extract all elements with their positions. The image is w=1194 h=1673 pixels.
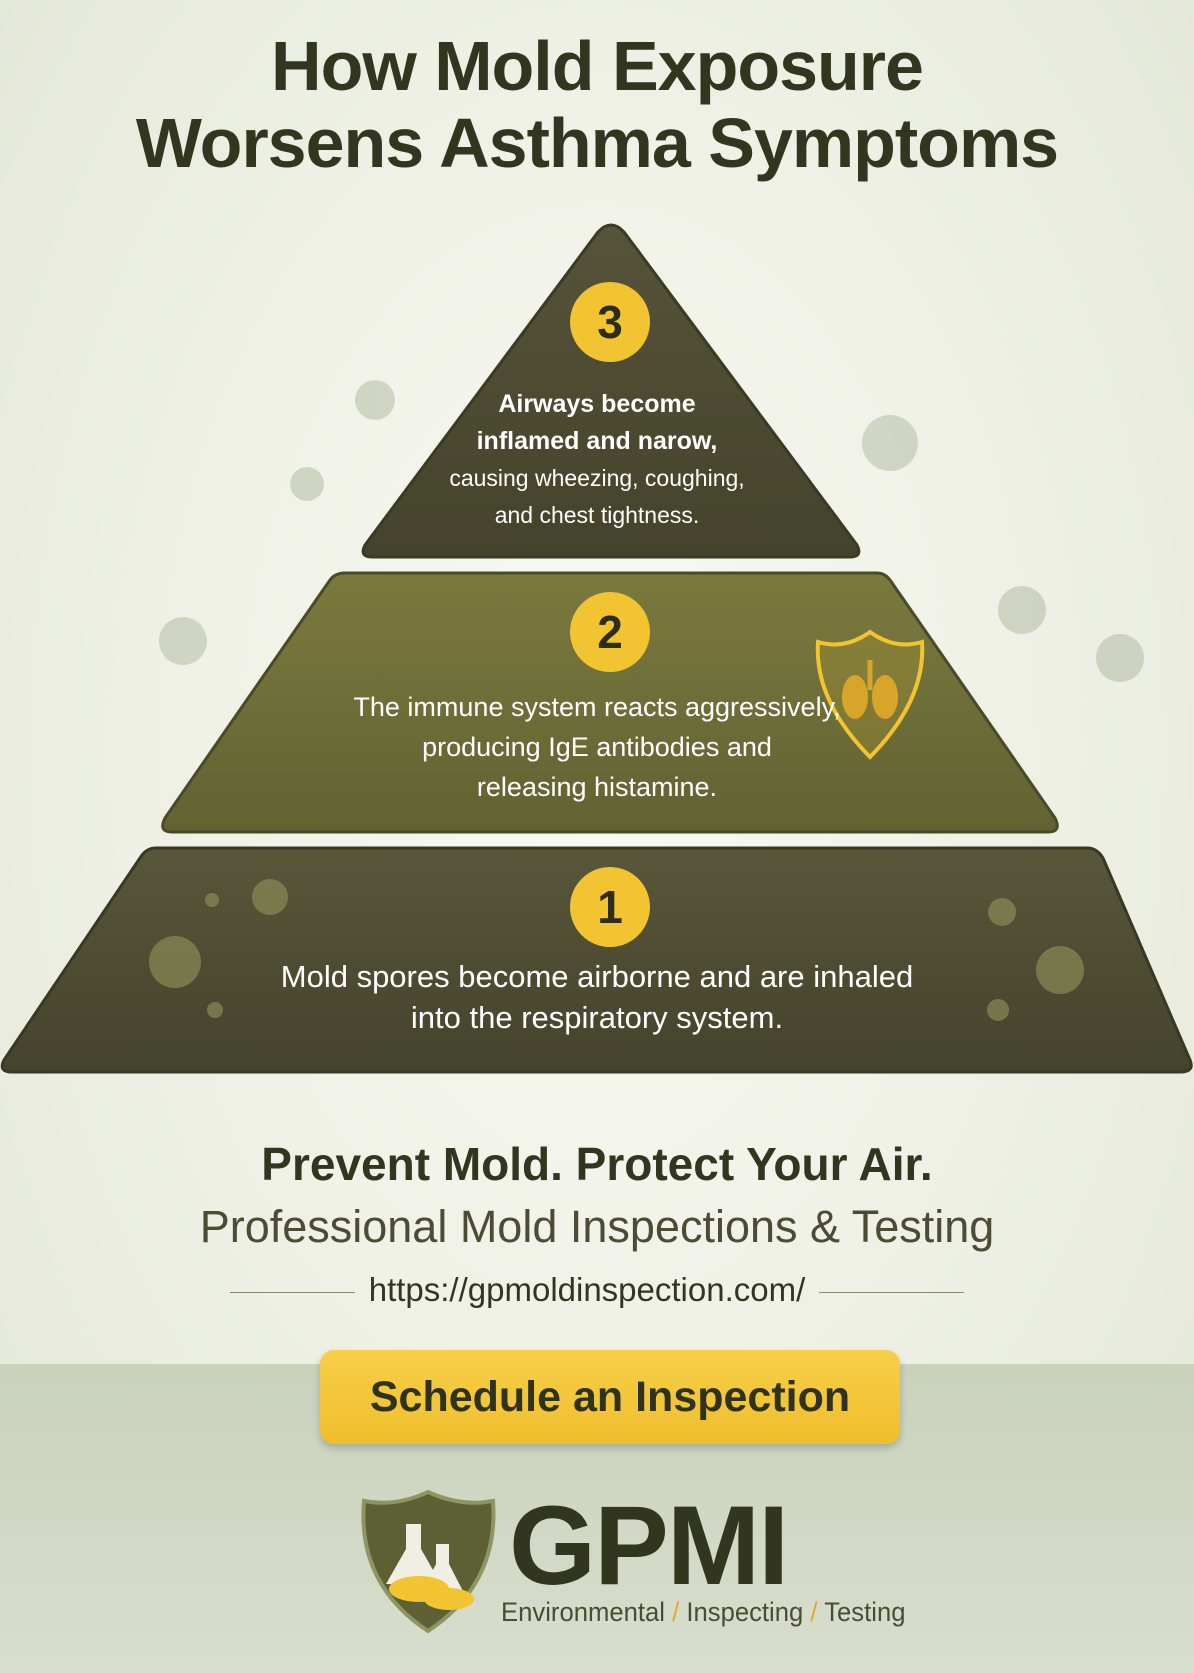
subtitle: Professional Mold Inspections & Testing <box>200 1201 994 1252</box>
badge 2: 2 <box>597 606 623 658</box>
tier 2 text: The immune system reacts aggressively, <box>353 692 841 722</box>
tier 2 text: producing IgE antibodies and <box>422 732 772 762</box>
tier 3 text: causing wheezing, coughing, <box>449 465 745 491</box>
background spores <box>159 380 1144 682</box>
badge 3: 3 <box>597 296 623 348</box>
tier 1 text: into the respiratory system. <box>411 1000 783 1035</box>
tier 1 <box>2 848 1191 1072</box>
tier 3 text: and chest tightness. <box>495 502 699 528</box>
tier 1 text: Mold spores become airborne and are inhaled <box>281 959 913 994</box>
tier 2 text <box>353 692 841 802</box>
tier 2 <box>163 573 1057 832</box>
badge 1: 1 <box>597 881 623 933</box>
tier 3 text: inflamed and narow, <box>477 427 717 455</box>
pyramid <box>0 224 1193 1074</box>
tier 1 text <box>281 959 913 1035</box>
tier 3 text <box>449 390 745 528</box>
spores on tier 1 <box>149 879 1084 1021</box>
url: https://gpmoldinspection.com/ <box>369 1271 805 1308</box>
icon: shield flasks <box>361 1490 496 1634</box>
bottom band <box>0 1364 1194 1673</box>
badge 1 <box>570 867 650 947</box>
brand tagline: Environmental / Inspecting / Testing <box>501 1597 905 1627</box>
title: How Mold Exposure <box>271 27 923 105</box>
tier 2 text: releasing histamine. <box>477 772 717 802</box>
tagline: Prevent Mold. Protect Your Air. <box>261 1138 933 1190</box>
tier 3 <box>363 225 859 557</box>
button: Schedule an Inspection <box>370 1373 850 1421</box>
brand name: GPMI <box>509 1483 787 1608</box>
logo <box>361 1483 905 1634</box>
button <box>320 1350 900 1444</box>
icon: shield lungs <box>818 632 922 757</box>
badge 3 <box>570 282 650 362</box>
title <box>136 27 1058 182</box>
title: Worsens Asthma Symptoms <box>136 104 1058 182</box>
badge 2 <box>570 592 650 672</box>
tier 3 text: Airways become <box>498 390 696 418</box>
